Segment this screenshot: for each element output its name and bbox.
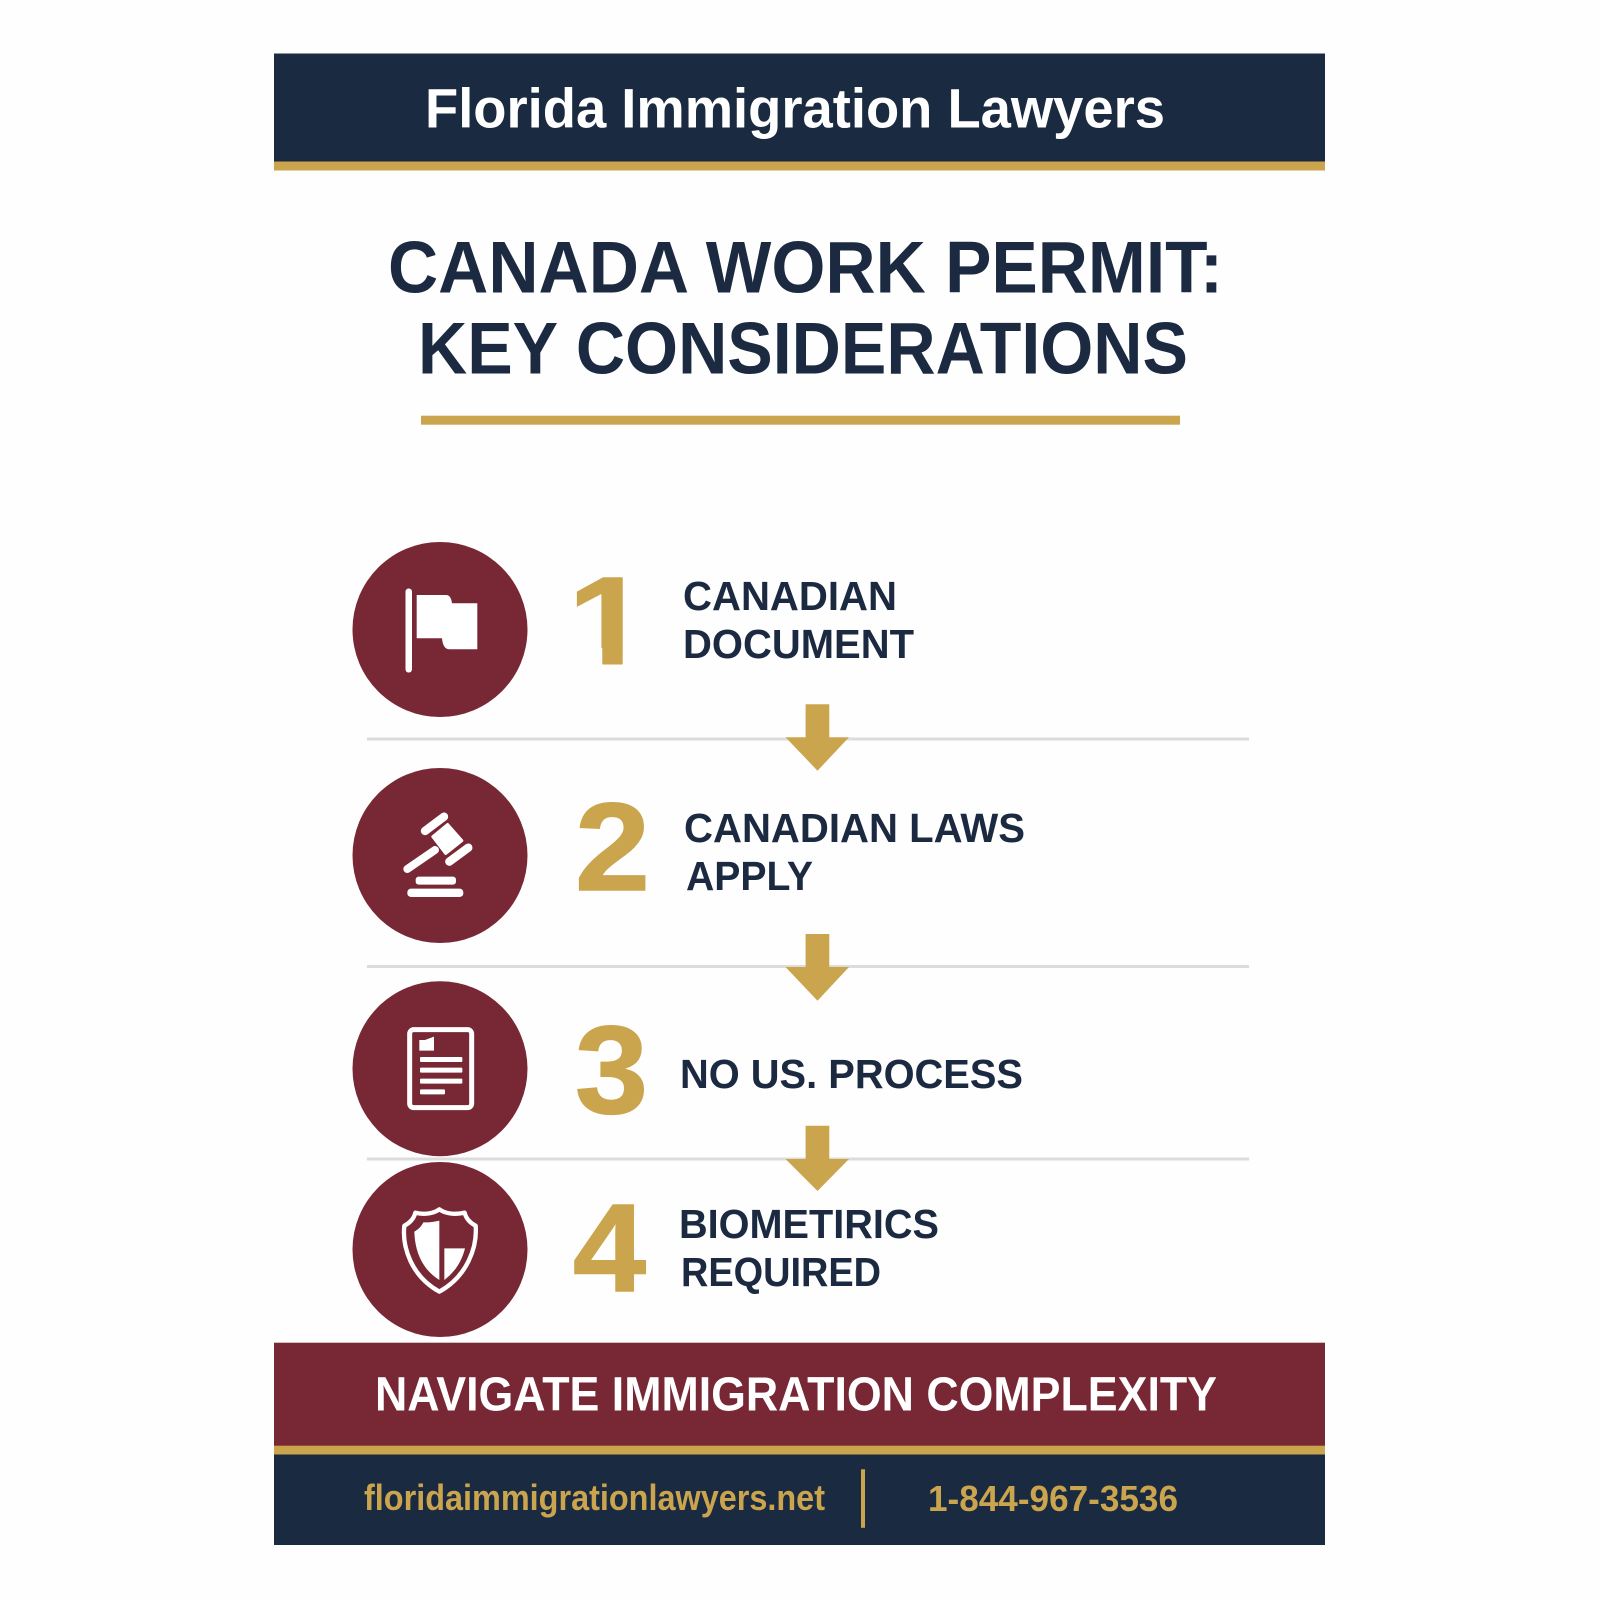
arrow 3 [786,1126,849,1191]
step 4 number: 4 [573,1179,646,1318]
step 2 label: APPLY [686,853,813,899]
step 3 [352,981,1023,1156]
step 2 label [684,805,1025,899]
step 3 number: 3 [575,1001,648,1140]
step 3 label: NO US. PROCESS [680,1051,1023,1097]
step 1 label: DOCUMENT [683,621,914,667]
infographic [274,54,1325,1545]
header banner [274,54,1325,170]
title: KEY CONSIDERATIONS [418,306,1188,390]
divider 1 [367,738,1249,740]
divider 2 [367,965,1249,968]
step 1 [352,542,914,717]
contact footer [274,1454,1325,1545]
divider 3 [367,1158,1249,1160]
title [388,226,1223,390]
arrow 2 [786,934,849,1001]
call to action text: NAVIGATE IMMIGRATION COMPLEXITY [375,1368,1217,1422]
step 2 label: CANADIAN LAWS [684,805,1025,851]
gold separator [274,1446,1325,1454]
call to action banner [274,1343,1325,1447]
step 4 [352,1162,939,1337]
step 1 icon: flag [352,542,528,717]
website: floridaimmigrationlawyers.net [364,1477,825,1518]
step 4 icon: shield [352,1162,528,1337]
title: CANADA WORK PERMIT: [388,226,1223,308]
step 2 number: 2 [575,778,650,917]
footer divider [861,1469,865,1528]
step 2 [352,768,1025,943]
step 3 icon: document [352,981,528,1156]
arrow 1 [786,704,849,771]
step 1 label: CANADIAN [683,573,897,619]
step 4 label [679,1201,939,1295]
phone number: 1-844-967-3536 [928,1478,1178,1519]
header text: Florida Immigration Lawyers [425,76,1165,140]
step 1 number: 1 [568,552,650,691]
step 2 icon: gavel [352,768,528,943]
step 1 label [683,573,914,667]
title underline [421,416,1180,425]
step 4 label: BIOMETIRICS [679,1201,939,1247]
step 4 label: REQUIRED [681,1249,881,1295]
